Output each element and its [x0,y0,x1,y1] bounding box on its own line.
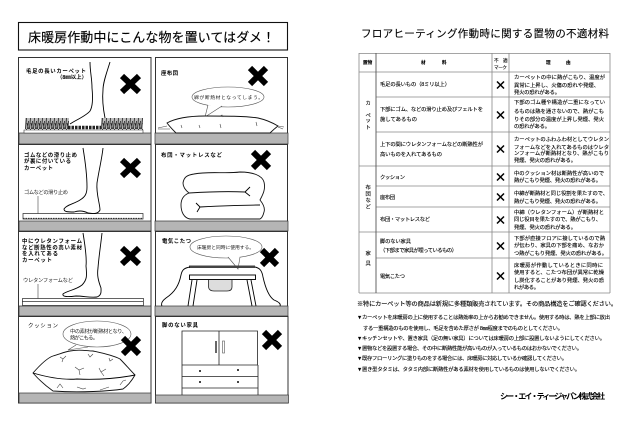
reasons: 熱がこもり発煙、発火の恐れがある。 [514,176,601,184]
reasons: 異常に上昇し、火傷の恐れや発煙、 [514,81,599,89]
category labels: ッ [366,118,371,124]
category labels: 団 [366,190,371,198]
panel: long-pile carpet: 毛足の長いカーペット [26,67,86,75]
panel: rubber-backed carpet: ゴムなどの滑り止め [24,188,68,196]
table header: マーク [494,65,507,71]
category labels: 布 [366,183,371,191]
panel: rubber-backed carpet [18,144,151,231]
reasons: の恐れがある。 [514,122,550,130]
notes list: ▼置物などを設置する場合、その中に断熱性能が高いものが入っているものはおかないでください。 [357,344,582,352]
category labels: 家 [366,249,372,257]
reasons: るものは熱を通さないので、熱がこも [514,107,604,115]
panel: cushion: 中の素材が断熱材となり、 [70,327,127,335]
material names: 高いものを入れてあるもの [380,150,442,158]
panel: furniture without legs [156,316,288,403]
material names [380,80,484,280]
reasons: つ熱がこもり発煙、発火の恐れがある。 [514,249,607,257]
panel: futon and mattress [155,144,288,231]
panel: floor cushion: 座布団 [161,69,178,77]
notes list [357,313,610,373]
panel: floor cushion: 綿が断熱材となってしまう。 [194,94,263,101]
reasons: 下部のゴム種や構造が二重になってい [514,98,605,106]
panel: furniture without legs: 脚のない家具 [162,321,199,329]
material names: 布団・マットレスなど [380,215,431,223]
material names: 上下の間にウレタンフォームなどの断熱性が [380,140,484,148]
material names: クッション [380,174,405,181]
table header: 材 [421,59,426,66]
panel: cushion: 熱がこもる。 [70,334,98,342]
table header: 置物 [363,59,373,66]
reasons: フォームなどを入れてあるものはウレタ [514,143,609,151]
notes list: ▼カーペットを床暖房の上に使用することは熱効率の上からお勧めできません。使用する時は、熱を上部に放出 [357,313,610,321]
material names: 施してあるもの [380,115,417,123]
table header: 料 [442,59,447,66]
category labels [366,100,372,267]
reasons: 中綿（ウレタンフォーム）が断熱材と [514,208,604,216]
reasons: 発火の恐れがある。 [514,88,560,96]
panel: cushion [18,316,151,403]
reasons: れがある。 [514,283,539,291]
reasons [514,73,609,291]
reasons: 中のクッション材は断熱性が高いので [514,169,604,177]
category labels: 具 [366,260,372,267]
category labels: ど [366,202,372,210]
left title box: 床暖房作動中にこんな物を置いてはダメ！ [28,30,275,45]
material names: 下部にゴム、などの滑り止め及びフェルトを [380,105,483,113]
reasons: カーペットのふわふわ材としてウレタン [514,135,609,143]
notes list: ▼既存フローリングに塗りものをする場合には、床暖房に対応しているか確認してください。 [357,354,567,362]
panel: rubber-backed carpet: が裏に付いている [24,157,71,165]
panel: electric kotatsu: 床暖房と同時に使用する。 [197,244,254,251]
reasons: ンフォームが断熱材となり、熱がこもり [514,149,609,157]
category labels: な [366,197,371,204]
left title box [18,22,288,50]
category labels: ト [366,125,371,131]
notes list: ▼置き型タタミは、タタミ内部に断熱性がある素材を使用しているものは使用しないでください。 [357,365,580,373]
unsuitable marks [497,82,504,280]
panel: futon and mattress: 布団・マットレスなど [161,151,223,159]
panel: urethane foam carpet: カーペット [22,257,52,264]
reasons: 下部が直接フロアに接しているので熱 [514,234,606,242]
right title: フロアヒーティング作動時に関する置物の不適材料 [361,27,610,40]
category labels: ペ [366,112,371,119]
panel: urethane foam carpet: ウレタンフォームなど [23,276,74,284]
panel: long-pile carpet: （8㎜以上） [57,73,87,81]
material names: （下部まで家具が埋っているもの） [380,246,457,254]
panel: cushion: クッション [28,322,58,330]
category labels: カ [366,100,371,107]
panel: rubber-backed carpet: カーペット [24,165,53,172]
reasons: が伝わり、家具の下部を痛め、なおか [514,241,605,249]
panel: rubber-backed carpet: ゴムなどの滑り止め [24,151,77,159]
material names: 電気こたつ [380,272,405,280]
panel: urethane foam carpet: 中にウレタンフォーム [22,237,83,245]
material names: 毛足の長いもの（8ミリ以上） [380,80,450,88]
panel: electric kotatsu: 電気こたつ [162,237,191,245]
materials table [359,53,610,293]
reasons: 同じ役目を果たすので、熱がこもり、 [514,215,601,223]
reasons: 使用すると、こたつ布団が異常に乾燥 [514,268,605,276]
notes list: ▼キッチンセットや、置き家具（足の無い家具）については床暖房の上部に設置しないようにしてください。 [357,334,605,342]
reasons: 熱がこもり発煙、発火の恐れがある。 [514,197,601,205]
reasons: 中綿が断熱材と同じ役割を果たすので、 [514,189,608,197]
reasons: し炭化することがあり発煙、発火の恐 [514,276,605,284]
panel: urethane foam carpet: を入れてある [22,250,58,258]
table header: 適 [503,57,508,64]
reasons: 発煙、発火の恐れがある。 [514,156,576,164]
panel: floor cushion [155,58,288,144]
table header [363,57,571,71]
table header: 由 [566,59,571,66]
emphasis note: ※特にカーペット等の商品は新規に多種類販売されています。その商品構造をご確認ください。 [357,300,617,308]
material names: 座布団 [380,193,395,201]
reasons: 床暖房が作動しているときに同時に [514,261,603,269]
panel: electric kotatsu [155,232,288,316]
reasons: 発煙、発火の恐れがある。 [514,223,576,231]
table grid [359,53,610,293]
reasons: カーペットの中に熱がこもり、温度が [514,73,606,81]
panel: long-pile carpet [18,58,151,144]
panel: urethane foam carpet [18,232,151,316]
table header: 理 [546,60,551,65]
panel: urethane foam carpet: など断熱性の高い素材 [22,244,83,252]
reasons: りその部分の温度が上昇し発煙、発火 [514,115,605,123]
notes list: する一重構造のものを使用し、毛足を含めた厚さが 8㎜程度までのものとしてください。 [363,324,563,332]
material names: 脚のない家具 [380,237,412,245]
table header: 不 [494,58,499,64]
company name: シー・エイ・ティージャパン株式会社 [500,391,605,401]
